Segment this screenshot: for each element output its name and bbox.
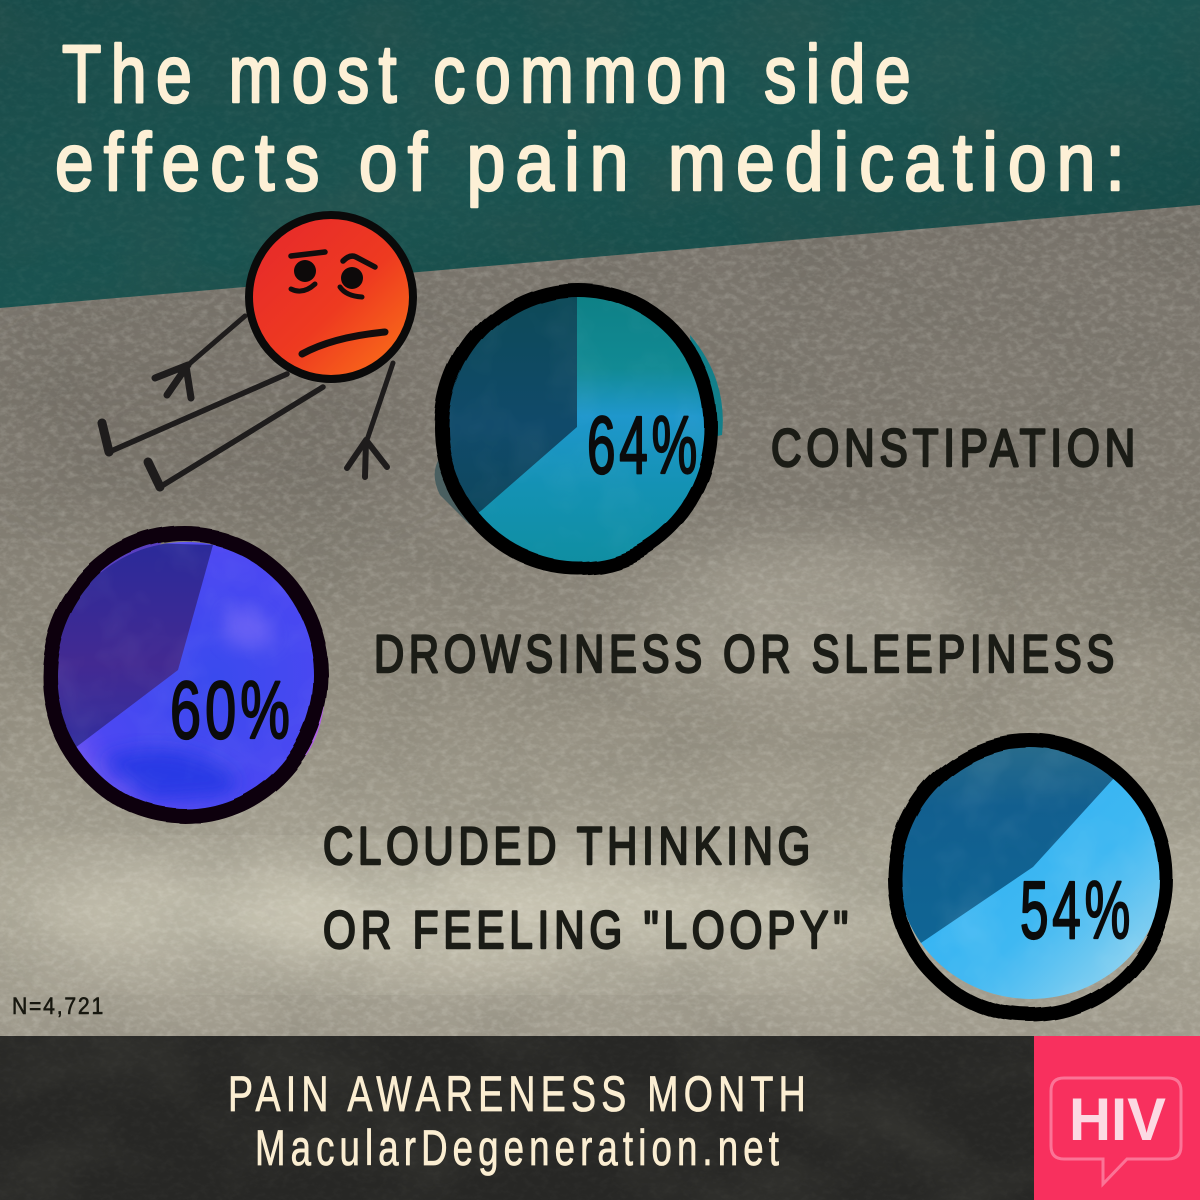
title: The most common side	[62, 29, 920, 120]
sample size note: N=4,721	[12, 993, 105, 1020]
illustration: sad stick figure slumped over	[102, 214, 414, 487]
icon: speech bubble	[1051, 1078, 1181, 1184]
label: clouded thinking or feeling loopy: CLOUDED THINKING	[323, 817, 815, 876]
logo text: HIV	[1069, 1086, 1166, 1153]
pie chart: 64% constipation	[430, 280, 723, 570]
footer text: pain awareness month: PAIN AWARENESS MONTH	[228, 1066, 811, 1122]
limbs of the figure	[102, 316, 393, 487]
footer text: website: MacularDegeneration.net	[255, 1120, 784, 1176]
logo badge	[1034, 1036, 1200, 1200]
label: clouded thinking or feeling loopy	[323, 817, 853, 960]
background: concrete wall	[0, 190, 1200, 1036]
header band: teal chalkboard	[0, 0, 1200, 310]
label: clouded thinking or feeling loopy: OR FEELING "LOOPY"	[323, 901, 853, 960]
value: 60%	[170, 665, 294, 756]
pie chart: 54% clouded thinking	[890, 740, 1166, 1015]
pie chart: 60% drowsiness	[49, 534, 325, 816]
footer band	[0, 1036, 1034, 1200]
value: 64%	[587, 400, 701, 491]
face	[248, 214, 414, 380]
value: 54%	[1020, 865, 1134, 956]
title	[55, 29, 1135, 208]
